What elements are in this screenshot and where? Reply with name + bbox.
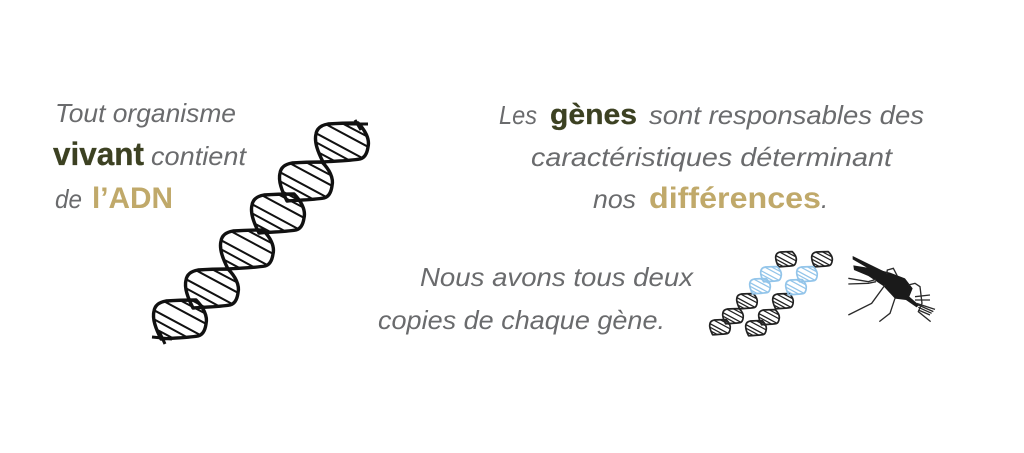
text: Nous avons tous deux copies de chaque gène: Nous avons tous deux bbox=[420, 262, 694, 292]
icon: two DNA copies with blue gene segments bbox=[708, 250, 834, 337]
text: Tout organisme vivant contient de l'ADN: Tout organisme bbox=[55, 98, 236, 128]
text: Tout organisme vivant contient de l'ADN: vivant bbox=[53, 136, 144, 172]
text: Les gènes sont responsables des caractéristiques déterminant nos différences: . bbox=[821, 184, 828, 214]
text: Les gènes sont responsables des caractéristiques déterminant nos différences: Les bbox=[499, 100, 537, 130]
icon: large DNA helix bbox=[148, 119, 374, 344]
text: Tout organisme vivant contient de l'ADN: l’ADN bbox=[92, 182, 173, 215]
text: Tout organisme vivant contient de l'ADN: contient bbox=[151, 141, 248, 171]
text: Nous avons tous deux copies de chaque gène: copies de chaque gène. bbox=[378, 305, 665, 335]
text: Tout organisme vivant contient de l'ADN: de bbox=[55, 184, 82, 214]
text: Nous avons tous deux copies de chaque gène bbox=[378, 262, 694, 335]
text: Les gènes sont responsables des caractéristiques déterminant nos différences: caractéristiques déterminant bbox=[531, 142, 894, 172]
text: Les gènes sont responsables des caractéristiques déterminant nos différences bbox=[499, 99, 924, 215]
text: Les gènes sont responsables des caractéristiques déterminant nos différences: sont responsables des bbox=[649, 100, 924, 130]
text: Les gènes sont responsables des caractéristiques déterminant nos différences: nos bbox=[593, 184, 636, 214]
icon: mosquito silhouette bbox=[848, 256, 935, 322]
text: Les gènes sont responsables des caractéristiques déterminant nos différences: différences bbox=[649, 182, 821, 215]
text: Tout organisme vivant contient de l'ADN bbox=[53, 98, 248, 215]
text: Les gènes sont responsables des caractéristiques déterminant nos différences: gènes bbox=[550, 99, 637, 131]
